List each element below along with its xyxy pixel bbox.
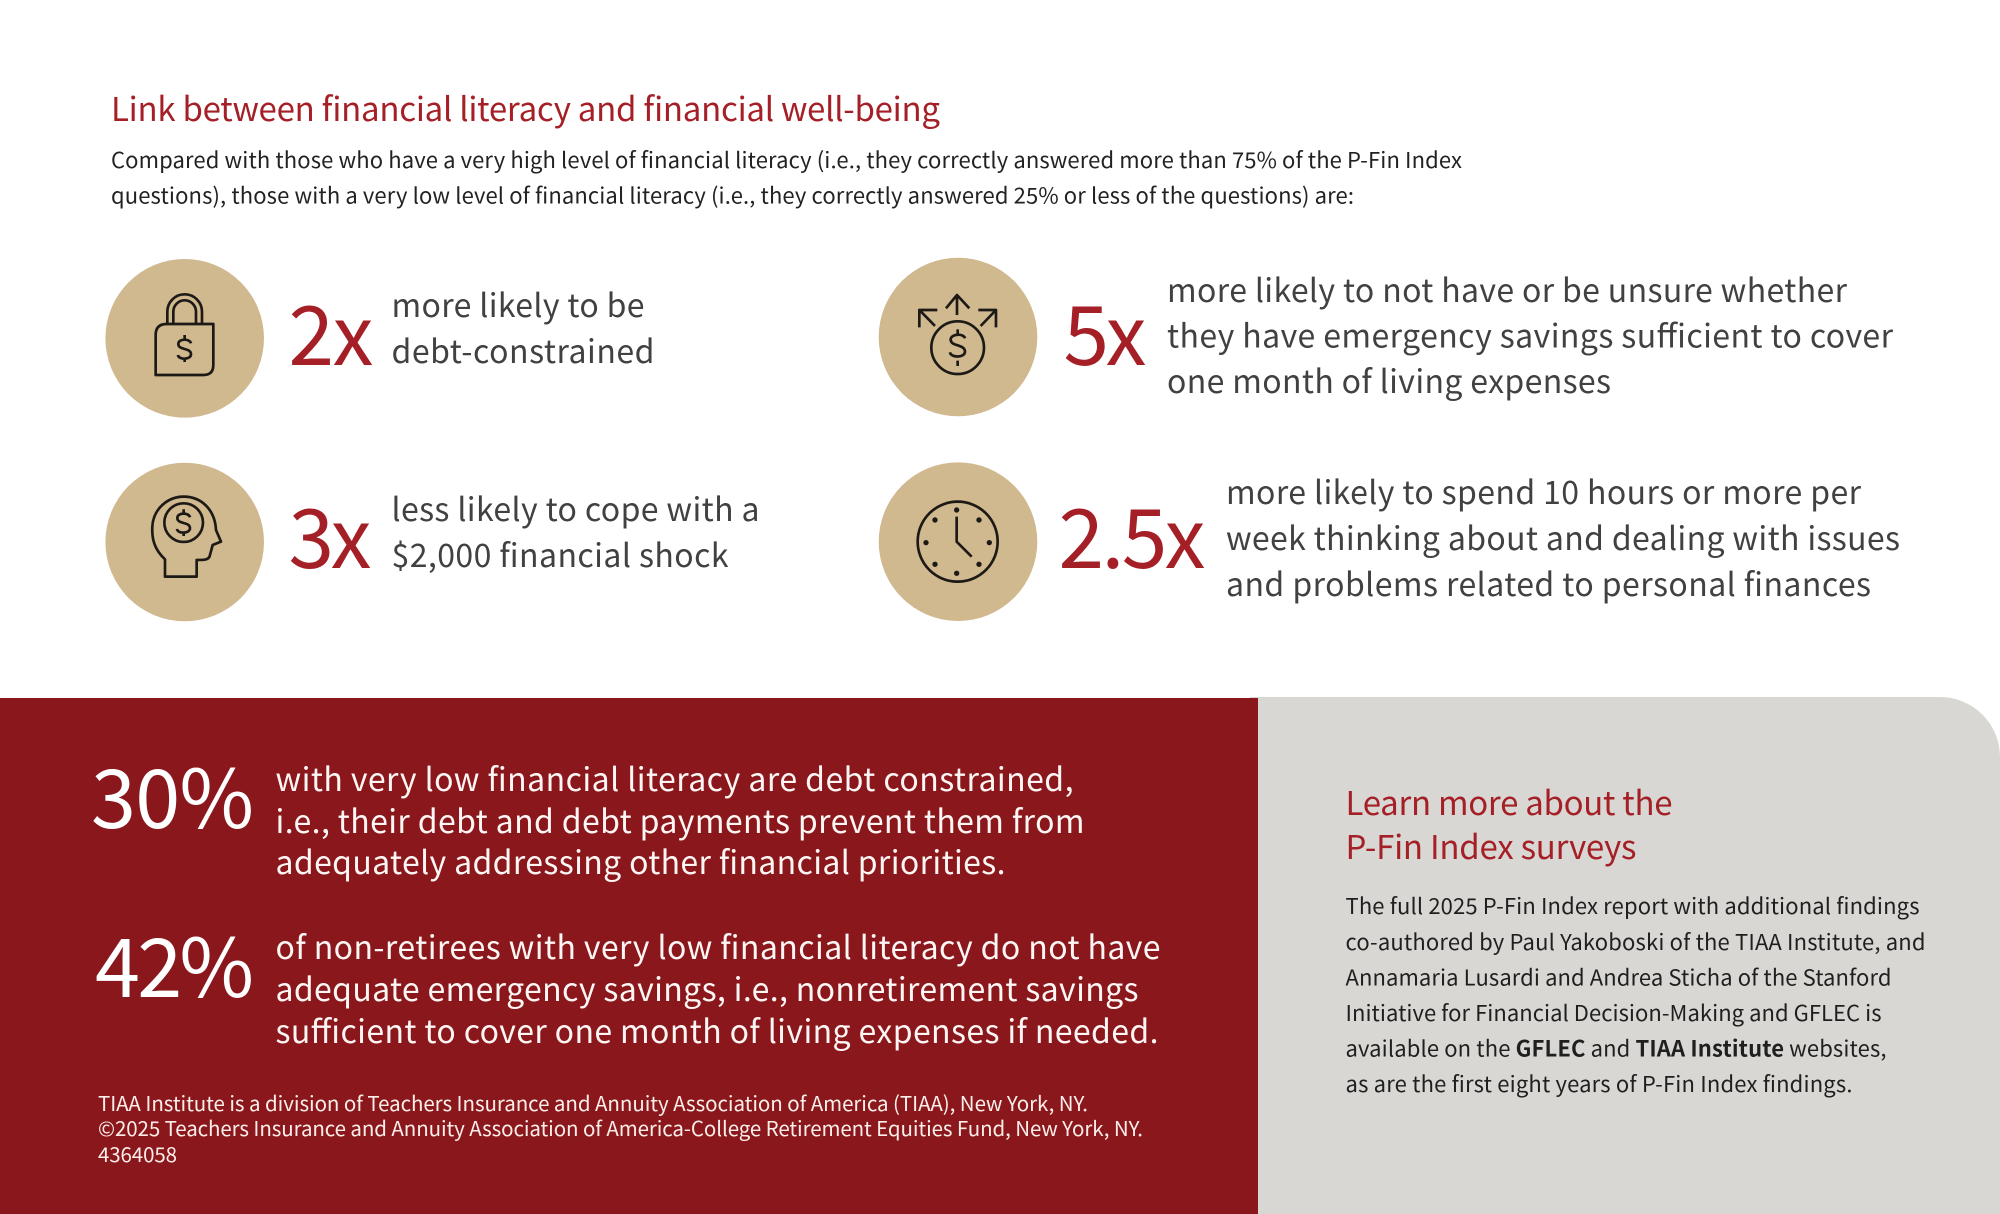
text block: report details: Initiative for Financial Decision-Making and GFLEC is [1346, 996, 1882, 1028]
description: debt-constrained [392, 327, 654, 373]
heading: learn more: Learn more about the [1346, 777, 1672, 825]
stat: 2.5x time spent [879, 462, 1900, 621]
icon: padlock with dollar sign [105, 259, 264, 418]
stat: 30% [91, 735, 1084, 884]
description: $2,000 financial shock [392, 531, 729, 577]
stat: 42% [95, 904, 1160, 1053]
stat: 42%: of non-retirees with very low financial literacy do not have [276, 923, 1160, 969]
heading: learn more: P-Fin Index surveys [1346, 821, 1636, 869]
panel: red key findings [0, 698, 1258, 1214]
heading: learn more [1346, 777, 1672, 869]
multiplier: 2x: 2x [288, 270, 374, 389]
description [392, 281, 654, 373]
text block: report details: co-authored by Paul Yakoboski of the TIAA Institute, and [1346, 925, 1926, 957]
icon: head with dollar sign [105, 463, 264, 621]
title: Link between financial literacy and financial well-being [111, 83, 940, 131]
text block: report details: The full 2025 P-Fin Index report with additional findings [1346, 889, 1920, 921]
stat: 30%: adequately addressing other financial priorities. [276, 838, 1006, 884]
text block: report details: available on the GFLEC and TIAA Institute websites, [1346, 1032, 1886, 1064]
description: more likely to be [392, 281, 644, 327]
panel: grey learn more [1250, 697, 2000, 1214]
multiplier: 3x: 3x [288, 473, 372, 592]
stat: 42%: 42% [95, 904, 254, 1021]
stat: 42%: adequate emergency savings, i.e., nonretirement savings [276, 965, 1138, 1011]
description: they have emergency savings sufficient to cover [1167, 312, 1894, 358]
text block: report details: Annamaria Lusardi and Andrea Sticha of the Stanford [1346, 960, 1892, 992]
stat: 30%: with very low financial literacy are debt constrained, [276, 755, 1074, 801]
footer: legal note: ©2025 Teachers Insurance and Annuity Association of America-College Retirement Equities Fund, New York, NY. [98, 1112, 1143, 1142]
description: more likely to not have or be unsure whether [1167, 266, 1848, 312]
intro text: questions), those with a very low level of financial literacy (i.e., they correctly answered 25% or less of the questions) are: [111, 178, 1354, 210]
description [1226, 468, 1900, 606]
section: financial well-being comparison [105, 83, 1900, 621]
description: more likely to spend 10 hours or more per [1226, 468, 1862, 514]
icon: clock [879, 462, 1037, 621]
text block: report details: as are the first eight years of P-Fin Index findings. [1346, 1067, 1852, 1099]
stat: 5x emergency savings [879, 258, 1894, 416]
intro text: Compared with those who have a very high level of financial literacy (i.e., they correctly answered more than 75% of the P-Fin Index [111, 143, 1462, 175]
stat: 30%: i.e., their debt and debt payments prevent them from [276, 797, 1084, 843]
description [392, 485, 760, 577]
multiplier: 2.5x: 2.5x [1058, 473, 1206, 592]
stat: 2x debt-constrained [105, 259, 654, 418]
text block: report details [1346, 889, 1926, 1099]
icon: dollar coin with three arrows [879, 258, 1037, 416]
stat: 30%: 30% [91, 735, 254, 852]
description: week thinking about and dealing with issues [1226, 514, 1900, 560]
stat: 3x less likely to cope [105, 463, 759, 621]
footer: legal note [98, 1087, 1143, 1168]
stat: 42%: sufficient to cover one month of living expenses if needed. [276, 1007, 1158, 1053]
description [1167, 266, 1894, 403]
intro text [111, 143, 1462, 210]
description: less likely to cope with a [392, 485, 760, 531]
description: one month of living expenses [1167, 357, 1611, 403]
footer: legal note: TIAA Institute is a division of Teachers Insurance and Annuity Association of America (TIAA), New York, NY. [98, 1087, 1088, 1117]
multiplier: 5x: 5x [1064, 270, 1146, 389]
description: and problems related to personal finances [1226, 560, 1871, 606]
footer: legal note: 4364058 [98, 1138, 177, 1168]
